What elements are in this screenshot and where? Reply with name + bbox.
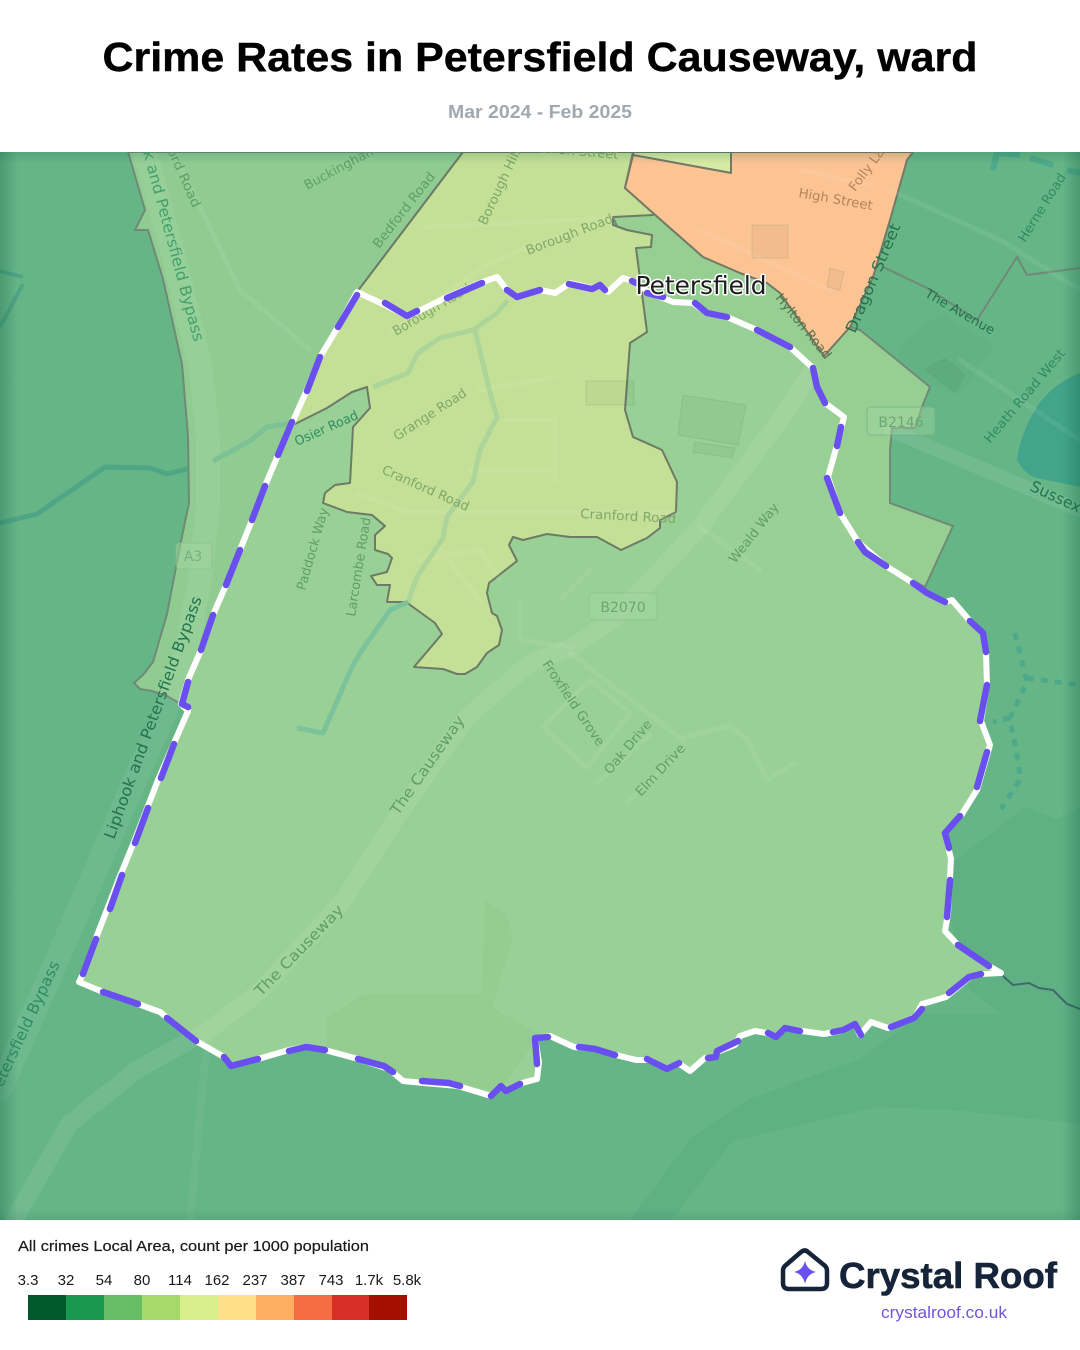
subtitle: date range: Mar 2024 - Feb 2025 [448,102,632,122]
streams [0,153,1080,1009]
street labels [0,125,1080,1098]
label: The Causeway lower: The Causeway [250,901,347,1001]
legend values: 114 [168,1272,192,1289]
legend [18,1238,422,1320]
darker surrounding area patches [1060,1010,1061,1011]
lake [1017,373,1080,487]
pale yellow neighbourhood at top [633,152,731,173]
label: Buckingham Road: Buckingham Road [302,125,413,194]
ward area fill [79,277,1001,1096]
label: Hylton Road: Hylton Road [772,291,834,363]
label: Bedford Road top: ord Road [163,146,203,210]
label: Cranford Road left: Cranford Road [379,463,471,515]
shield: B2146 [867,407,935,435]
label: Grange Road: Grange Road [391,386,470,444]
label: Liphook and Petersfield Bypass: Liphook and Petersfield Bypass [101,594,206,841]
label: Elm Drive: Elm Drive [633,741,689,800]
website url: crystalroof.co.uk [881,1304,1008,1322]
shield: B2146: B2146 [878,415,924,431]
legend values: 162 [204,1272,230,1289]
legend values: 3.3 [18,1272,38,1289]
neighbourhood boundary lines on right [883,257,1080,320]
legend values: 387 [280,1272,306,1289]
left upper light-green neighbourhood [128,152,463,704]
road shields [176,407,935,620]
legend values: 237 [242,1272,268,1289]
label: Weald Way: Weald Way [726,500,783,566]
buildings [586,225,965,458]
label: Borough Road lower: Borough Road [390,281,473,339]
yellow-green neighbourhood [293,152,677,674]
label: Osier Road: Osier Road [293,408,361,450]
label: Larcombe Road: Larcombe Road [344,517,375,618]
label: Oak Drive: Oak Drive [602,717,655,778]
right light-green neighbourhood [613,213,953,587]
label: bypass upper: k and Petersfield Bypass [139,148,208,343]
wordmark: Crystal Roof [839,1255,1058,1296]
label: Dragon Street: Dragon Street [842,221,904,336]
label: Paddock Way: Paddock Way [294,506,332,592]
label: The Causeway upper: The Causeway [386,712,468,819]
label: Froxfield Grove: Froxfield Grove [539,658,607,749]
label: Herne Road: Herne Road [1016,171,1070,245]
ward boundary purple dashes [83,281,989,1096]
map base: low-crime surrounding area [0,152,1080,1220]
map edge vignette [0,152,1080,1220]
label: Petersfield town name: Petersfield [636,271,766,300]
legend values: 54 [96,1272,112,1289]
orange high-crime town centre [625,152,913,356]
legend values: 743 [318,1272,344,1289]
legend colour scale [28,1295,407,1320]
label: The Avenue: The Avenue [921,286,997,338]
label: High Street: High Street [797,186,874,214]
label: street at top edge: Swan Street [539,141,619,163]
shield: B2070 [589,593,657,620]
legend values: 80 [134,1272,150,1289]
label: Cranford Road right: Cranford Road [580,507,676,527]
label: Borough Road upper: Borough Road [524,212,615,259]
legend values: 32 [58,1272,74,1289]
legend values: 5.8k [393,1272,422,1289]
shield: B2070: B2070 [600,600,646,616]
shield: A3: A3 [184,549,202,565]
legend values [18,1272,422,1289]
label: Borough Hill: Borough Hill [476,147,524,228]
logo: Crystal Roof [783,1250,1058,1322]
ward boundary white line [79,277,1001,1096]
ward field shade [327,900,540,1090]
label: Heath Road West: Heath Road West [982,347,1069,447]
legend title: All crimes Local Area, count per 1000 population [18,1238,369,1255]
shield: A3 [176,543,212,569]
legend values: 1.7k [355,1272,384,1289]
light roads [0,152,1080,1220]
title: Crime Rates in Petersfield Causeway, ward [102,34,978,80]
label: Folly Lane: Folly Lane [846,133,898,194]
label: Bedford Road: Bedford Road [370,170,439,251]
icon: house with star [783,1250,827,1289]
